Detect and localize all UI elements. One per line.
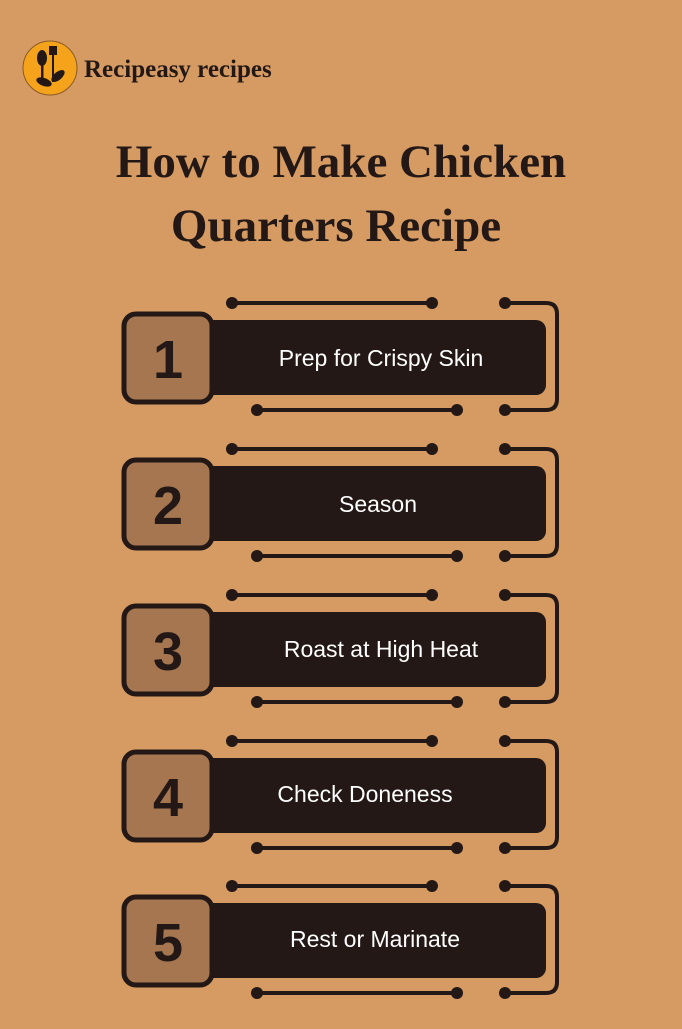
logo: [23, 41, 272, 95]
step 5: Rest or Marinate: [290, 926, 460, 952]
step 5: 5: [153, 913, 183, 973]
title: Quarters Recipe: [171, 200, 501, 252]
step 1: Prep for Crispy Skin: [279, 345, 483, 371]
icon: logo circle: [23, 41, 77, 95]
step 4: Check Doneness: [277, 781, 453, 807]
step 5: [124, 880, 557, 999]
step 4: [124, 735, 557, 854]
step 2: [124, 443, 557, 562]
step 2: 2: [153, 476, 183, 536]
step 4: 4: [153, 768, 183, 828]
title: [116, 136, 566, 252]
step 3: Roast at High Heat: [284, 636, 479, 662]
step 1: [124, 297, 557, 416]
step 3: 3: [153, 622, 183, 682]
step 3: [124, 589, 557, 708]
brand name: Recipeasy recipes: [84, 56, 272, 83]
title: How to Make Chicken: [116, 136, 566, 188]
step 2: Season: [339, 491, 417, 517]
step 1: 1: [153, 330, 183, 390]
